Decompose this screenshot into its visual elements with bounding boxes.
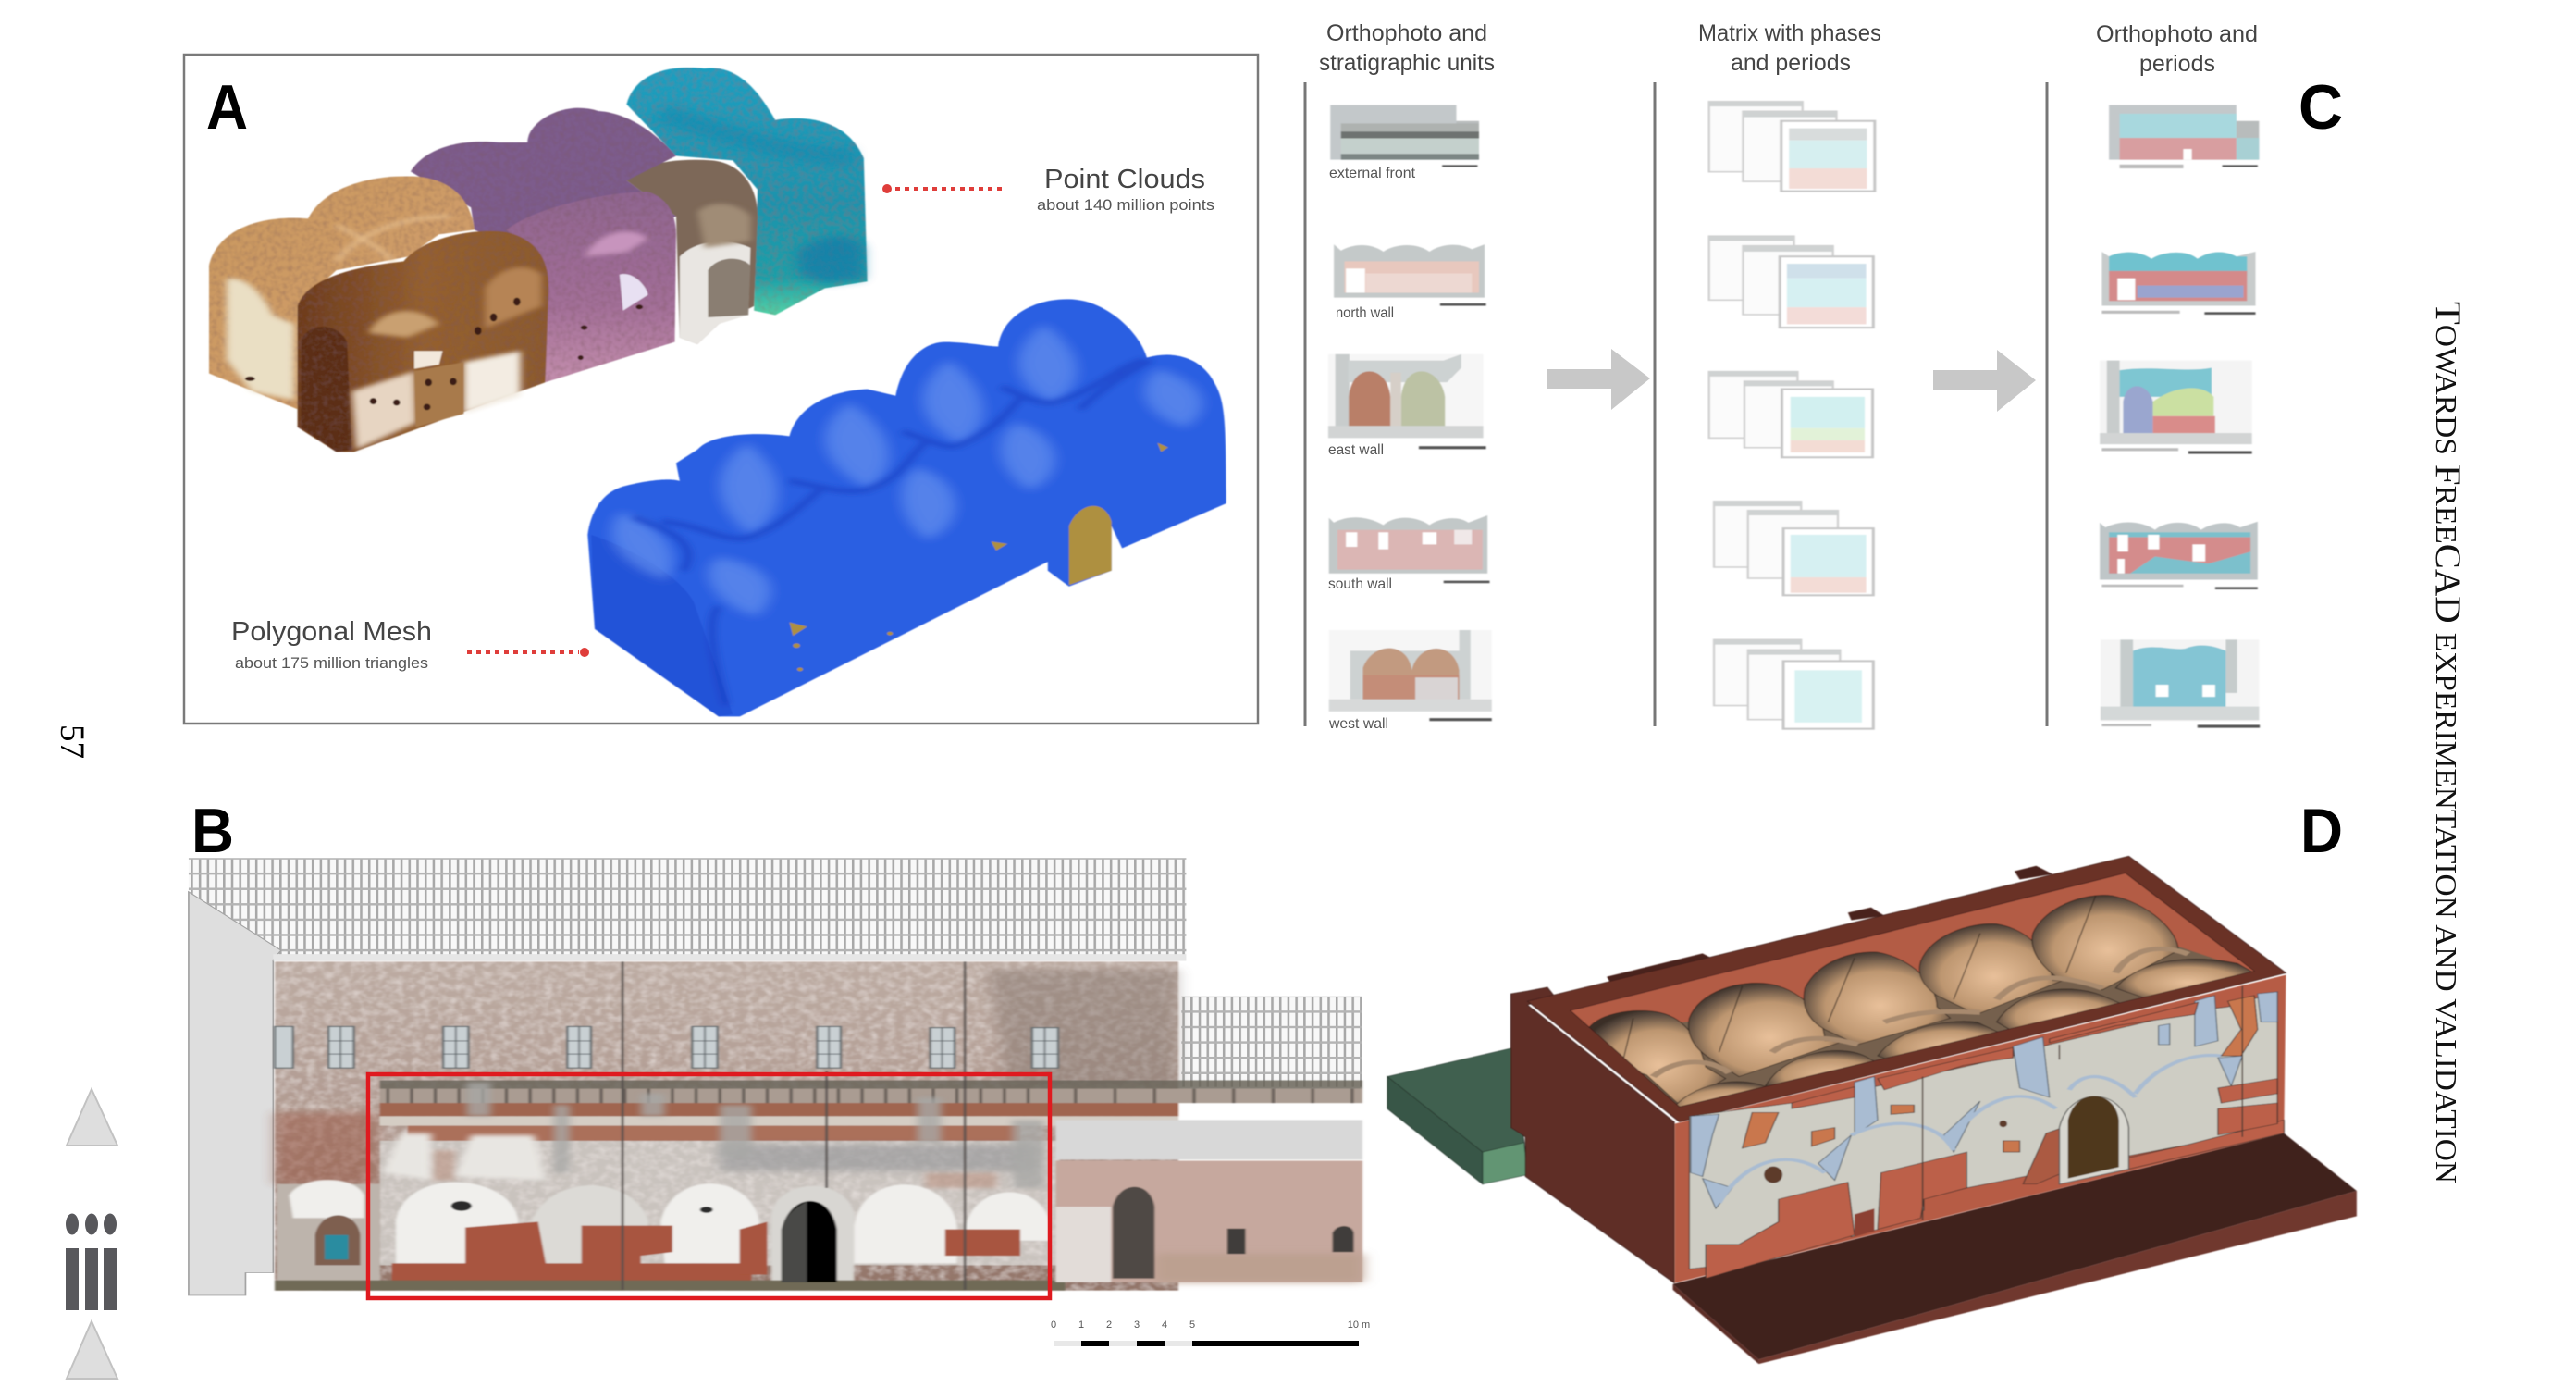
orange patches bbox=[1743, 996, 2258, 1152]
period scales bbox=[2188, 165, 2260, 728]
period thumb: south wall bbox=[2100, 522, 2258, 580]
vaults bbox=[1587, 895, 2258, 1120]
callout: polygonal mesh bbox=[231, 617, 589, 672]
arrow: to periods bbox=[1933, 350, 2036, 412]
brick patches bbox=[1706, 1002, 2284, 1279]
3D model bbox=[1387, 856, 2357, 1364]
door in gold bbox=[1069, 506, 1112, 585]
vault traces bbox=[289, 1180, 1050, 1282]
scale bar: 2 bbox=[1106, 1319, 1112, 1331]
buttress caps bbox=[1607, 866, 2052, 983]
elevation drawing bbox=[189, 858, 1362, 1295]
callout: polygonal mesh: about 175 million triangles bbox=[235, 655, 428, 672]
ground slab bbox=[1673, 1133, 2357, 1364]
matrix sheet 1 bbox=[1781, 121, 1875, 192]
thumb: west wall bbox=[1329, 630, 1492, 712]
heading: matrix with phases and periods: Matrix with phases bbox=[1698, 20, 1881, 46]
scale ticks bbox=[1419, 165, 1492, 721]
heading: matrix with phases and periods bbox=[1698, 20, 1881, 76]
annex bbox=[1055, 1120, 1362, 1159]
heading: orthophoto and stratigraphic units: stratigraphic units bbox=[1319, 50, 1495, 76]
heading: orthophoto and periods: periods bbox=[2139, 51, 2215, 77]
scale bar: 4 bbox=[1162, 1319, 1167, 1331]
column: matrices bbox=[1709, 102, 1875, 729]
panel D: coloured 3D model bbox=[1387, 796, 2357, 1364]
wall-top rim bbox=[1527, 856, 2286, 1121]
red highlight frame bbox=[368, 1074, 1050, 1298]
plaster zone bbox=[380, 1141, 1060, 1265]
vault creases bbox=[634, 360, 1151, 705]
panel B letter: B bbox=[191, 796, 234, 866]
photographic wall bbox=[275, 961, 1362, 1291]
point cloud model bbox=[209, 68, 868, 452]
thumb: north wall bbox=[1334, 244, 1485, 298]
running title: T OWARDS F REE CAD EXPERIMENTATION AND VALIDATION bbox=[2428, 302, 2468, 1183]
arrow: to matrix bbox=[1547, 349, 1650, 410]
heading: orthophoto and periods bbox=[2096, 21, 2258, 77]
scale bar bbox=[1051, 1319, 1370, 1346]
scale bar: 3 bbox=[1134, 1319, 1140, 1331]
door bbox=[2059, 1096, 2128, 1184]
cornice bbox=[380, 1081, 1362, 1089]
wall labels: south wall bbox=[1328, 576, 1392, 592]
interior back wall bbox=[1571, 873, 2258, 1110]
end wall bbox=[1511, 987, 1674, 1282]
matrix sheet 3 bbox=[1782, 389, 1872, 457]
wall labels bbox=[1328, 166, 1416, 732]
callout: point clouds: about 140 million points bbox=[1037, 197, 1214, 214]
callout: point clouds bbox=[882, 165, 1214, 214]
thumb: south wall bbox=[1329, 515, 1487, 574]
vault fans bbox=[611, 324, 1202, 615]
callout: point clouds: Point Clouds bbox=[1044, 165, 1205, 194]
scale bar: 0 bbox=[1051, 1319, 1056, 1331]
heading: orthophoto and stratigraphic units bbox=[1319, 20, 1495, 76]
blue plaster strips bbox=[1691, 992, 2277, 1208]
wall labels: west wall bbox=[1328, 716, 1388, 732]
scale bar: 5 bbox=[1189, 1319, 1195, 1331]
annex roof bbox=[1181, 997, 1362, 1087]
panel C letter: C bbox=[2299, 72, 2343, 142]
period thumb: east wall bbox=[2100, 361, 2252, 444]
matrix sheet 2 bbox=[1780, 256, 1873, 328]
panel A frame bbox=[184, 55, 1258, 724]
windows bbox=[275, 1026, 1058, 1068]
matrix sheet 4 bbox=[1783, 528, 1873, 595]
panel C: workflow bbox=[1305, 20, 2343, 732]
wall labels: north wall bbox=[1336, 305, 1394, 321]
thumb: external front bbox=[1330, 105, 1479, 160]
wall labels: external front bbox=[1329, 166, 1416, 181]
scale bar: 10 m bbox=[1348, 1319, 1370, 1331]
page number: 57 bbox=[53, 724, 91, 759]
period thumb: west wall bbox=[2101, 639, 2259, 721]
plaster areas bbox=[1689, 992, 2277, 1269]
brick patches bbox=[392, 1221, 1020, 1284]
wall labels: east wall bbox=[1328, 442, 1384, 458]
heading: matrix with phases and periods: and periods bbox=[1731, 50, 1851, 76]
panel A letter: A bbox=[206, 72, 248, 142]
thumb: east wall bbox=[1328, 354, 1484, 438]
heading: orthophoto and stratigraphic units: Orthophoto and bbox=[1326, 20, 1487, 46]
small door bbox=[315, 1215, 360, 1265]
structural lines bbox=[622, 961, 965, 1290]
main door bbox=[782, 1201, 837, 1282]
polygonal mesh model bbox=[587, 299, 1226, 716]
panel D letter: D bbox=[2300, 796, 2343, 866]
icon: column emblem bbox=[66, 1089, 117, 1379]
column: orthophotos with stratigraphic units bbox=[1328, 105, 1492, 732]
tiled roof bbox=[189, 858, 1186, 955]
column: orthophotos with periods bbox=[2100, 105, 2260, 728]
front wall bbox=[1675, 975, 2286, 1282]
matrix sheet 5 bbox=[1783, 661, 1873, 729]
period thumb: north wall bbox=[2101, 252, 2256, 306]
panel A: point clouds and mesh bbox=[184, 55, 1258, 724]
period thumb: external front bbox=[2109, 105, 2259, 160]
heading: orthophoto and periods: Orthophoto and bbox=[2096, 21, 2258, 47]
callout: polygonal mesh: Polygonal Mesh bbox=[231, 617, 432, 647]
gable section bbox=[189, 892, 281, 1295]
scale bar: 1 bbox=[1078, 1319, 1084, 1331]
green annex block bbox=[1387, 1048, 1527, 1184]
panel B: elevation bbox=[189, 796, 1370, 1346]
